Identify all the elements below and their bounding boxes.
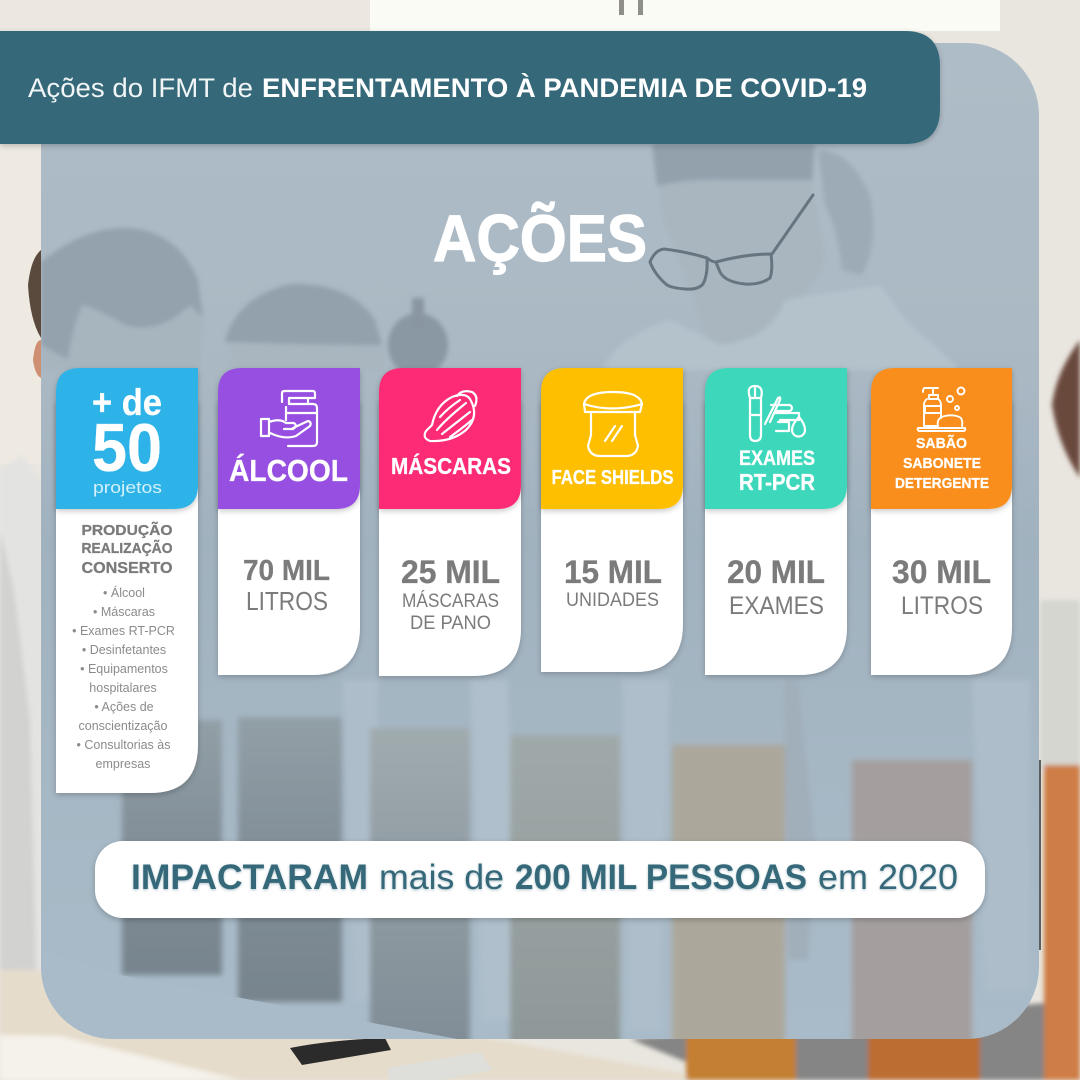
impact text: mais de — [379, 858, 504, 897]
card header: blue — [56, 368, 198, 509]
card: exames rt-pcr — [705, 368, 847, 675]
card: álcool: ÁLCOOL — [229, 453, 348, 488]
impact text: 200 MIL PESSOAS — [515, 858, 807, 897]
card: face shields: UNIDADES — [566, 590, 659, 611]
card: + de 50 projetos — [56, 368, 198, 793]
card: álcool — [218, 368, 360, 675]
impact banner — [95, 841, 985, 918]
card: álcool: LITROS — [246, 586, 328, 616]
card: + de 50 projetos: projetos — [93, 478, 162, 497]
card header: orange — [871, 368, 1012, 509]
production list: empresas — [96, 757, 150, 771]
card header: teal — [705, 368, 847, 509]
card: sabão sabonete detergente: 30 MIL — [892, 554, 991, 590]
card: sabão sabonete detergente: LITROS — [901, 592, 983, 620]
title text: Ações do IFMT de — [28, 73, 253, 103]
production list: conscientização — [79, 719, 168, 733]
title text: ENFRENTAMENTO À PANDEMIA DE COVID-19 — [262, 72, 867, 103]
icon: face shield — [584, 392, 642, 456]
card: + de 50 projetos: 50 — [92, 410, 162, 486]
card: sabão sabonete detergente — [871, 368, 1012, 675]
impact text: em 2020 — [818, 858, 958, 897]
photo showing through: lab coats and liquid columns — [122, 680, 1030, 1048]
photo showing through: people — [41, 144, 960, 377]
production list: • Ações de — [94, 700, 154, 714]
card: máscaras — [379, 368, 521, 676]
heading: AÇÕES: AÇÕES — [433, 201, 647, 275]
icon: test tube and swab — [749, 386, 805, 441]
card header: yellow — [541, 368, 683, 509]
card header: purple — [218, 368, 360, 509]
card: face shields: FACE SHIELDS — [552, 467, 674, 489]
card: máscaras: DE PANO — [410, 613, 491, 634]
card header: pink — [379, 368, 521, 509]
card: exames rt-pcr: RT-PCR — [739, 469, 815, 495]
card: exames rt-pcr: EXAMES — [729, 592, 824, 620]
card: exames rt-pcr: 20 MIL — [727, 554, 825, 590]
impact text: IMPACTARAM — [131, 858, 368, 897]
card: face shields — [541, 368, 683, 672]
production list: • Consultorias às — [76, 738, 171, 752]
production list: • Álcool — [103, 585, 145, 600]
card: máscaras: MÁSCARAS — [402, 591, 499, 612]
icon: hand and sanitizer — [261, 391, 317, 446]
card: sabão sabonete detergente: DETERGENTE — [895, 475, 989, 492]
production list: REALIZAÇÃO — [82, 539, 173, 557]
production list: • Equipamentos — [80, 662, 168, 676]
production list: CONSERTO — [82, 560, 172, 577]
card: álcool: 70 MIL — [243, 555, 330, 587]
card: máscaras: 25 MIL — [401, 554, 500, 590]
card: sabão sabonete detergente: SABONETE — [903, 455, 981, 472]
production list: • Exames RT-PCR — [72, 624, 175, 638]
production list: hospitalares — [89, 681, 157, 695]
icon: soap and bottle — [918, 388, 965, 431]
card: face shields: 15 MIL — [564, 554, 662, 590]
production list: • Máscaras — [93, 605, 155, 619]
card: sabão sabonete detergente: SABÃO — [916, 434, 967, 452]
card: + de 50 projetos: + de — [92, 382, 162, 423]
man's glasses — [650, 195, 813, 289]
card: máscaras: MÁSCARAS — [391, 452, 511, 479]
title bar — [0, 31, 940, 144]
production list: PRODUÇÃO — [82, 521, 173, 539]
icon: fabric mask — [425, 391, 476, 441]
production list: • Desinfetantes — [82, 643, 166, 657]
card: exames rt-pcr: EXAMES — [739, 447, 815, 470]
production list — [72, 521, 175, 771]
